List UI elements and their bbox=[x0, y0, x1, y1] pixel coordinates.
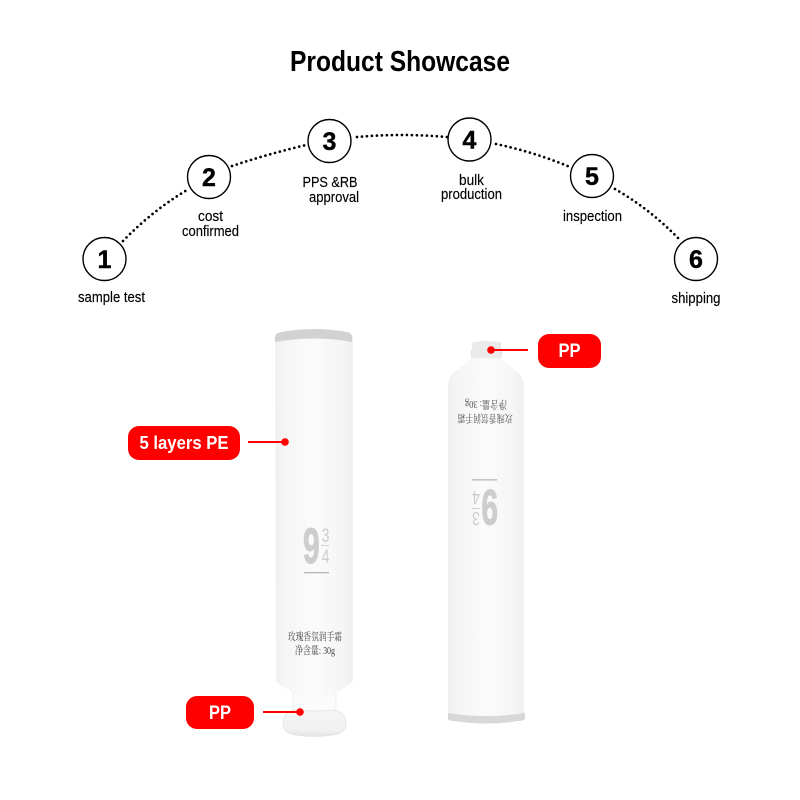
callout: PP neck: PP bbox=[558, 341, 581, 362]
step 3: approval bbox=[309, 189, 359, 206]
neck bbox=[293, 690, 336, 714]
step 2: 2 bbox=[202, 164, 216, 192]
threaded neck bbox=[471, 342, 502, 360]
step 4 bbox=[441, 118, 502, 203]
step 5: 5 bbox=[585, 163, 599, 191]
inverted logo and text: 4 bbox=[472, 486, 480, 508]
logo 9 3/4: 9 bbox=[303, 518, 320, 574]
logo 9 3/4: 4 bbox=[322, 546, 329, 568]
step 3 bbox=[302, 120, 359, 206]
step 6 bbox=[672, 238, 720, 307]
tube body bbox=[448, 358, 524, 718]
step 1: sample test bbox=[78, 289, 146, 306]
tube body bbox=[275, 330, 353, 695]
step 1 bbox=[78, 238, 146, 306]
step 4: production bbox=[441, 186, 502, 203]
callout: 5 layers PE bbox=[128, 426, 289, 460]
step 2: cost bbox=[198, 208, 224, 225]
callout: PP neck bbox=[487, 334, 601, 368]
step 3: PPS &RB bbox=[302, 174, 358, 191]
process timeline bbox=[78, 118, 720, 307]
callout: PP cap bbox=[186, 696, 304, 729]
step 2 bbox=[182, 156, 239, 240]
crimped grey band bbox=[275, 329, 352, 342]
step 5: inspection bbox=[563, 208, 622, 225]
right tube, cap removed, upside down bbox=[448, 342, 525, 724]
inverted logo and text: 3 bbox=[472, 507, 480, 529]
bottom grey band bbox=[448, 713, 525, 724]
cap bbox=[283, 710, 346, 736]
step 1: 1 bbox=[98, 246, 112, 274]
left tube, cap down bbox=[275, 329, 353, 736]
dotted connectors bbox=[123, 135, 680, 241]
step 3: 3 bbox=[323, 128, 336, 156]
callout: 5 layers PE: 5 layers PE bbox=[140, 432, 228, 453]
callout: PP cap: PP bbox=[209, 703, 231, 724]
net content: 净含量: 30g bbox=[295, 643, 335, 657]
step 5 bbox=[563, 154, 622, 225]
title: Product Showcase bbox=[290, 46, 510, 78]
step 4: 4 bbox=[463, 126, 477, 154]
inverted logo and text: 玫瑰香氛润手霜 bbox=[457, 412, 512, 425]
logo 9 3/4 bbox=[303, 518, 329, 574]
inverted logo and text: 净含量: 30g bbox=[465, 398, 507, 412]
step 2: confirmed bbox=[182, 223, 239, 240]
step 6: shipping bbox=[672, 290, 720, 307]
logo 9 3/4: 3 bbox=[322, 525, 329, 547]
inverted logo and text bbox=[457, 398, 512, 535]
step 4: bulk bbox=[459, 172, 484, 189]
inverted logo and text: 9 bbox=[481, 479, 498, 535]
product name: 玫瑰香氛润手霜 bbox=[288, 630, 342, 643]
step 6: 6 bbox=[689, 246, 703, 274]
